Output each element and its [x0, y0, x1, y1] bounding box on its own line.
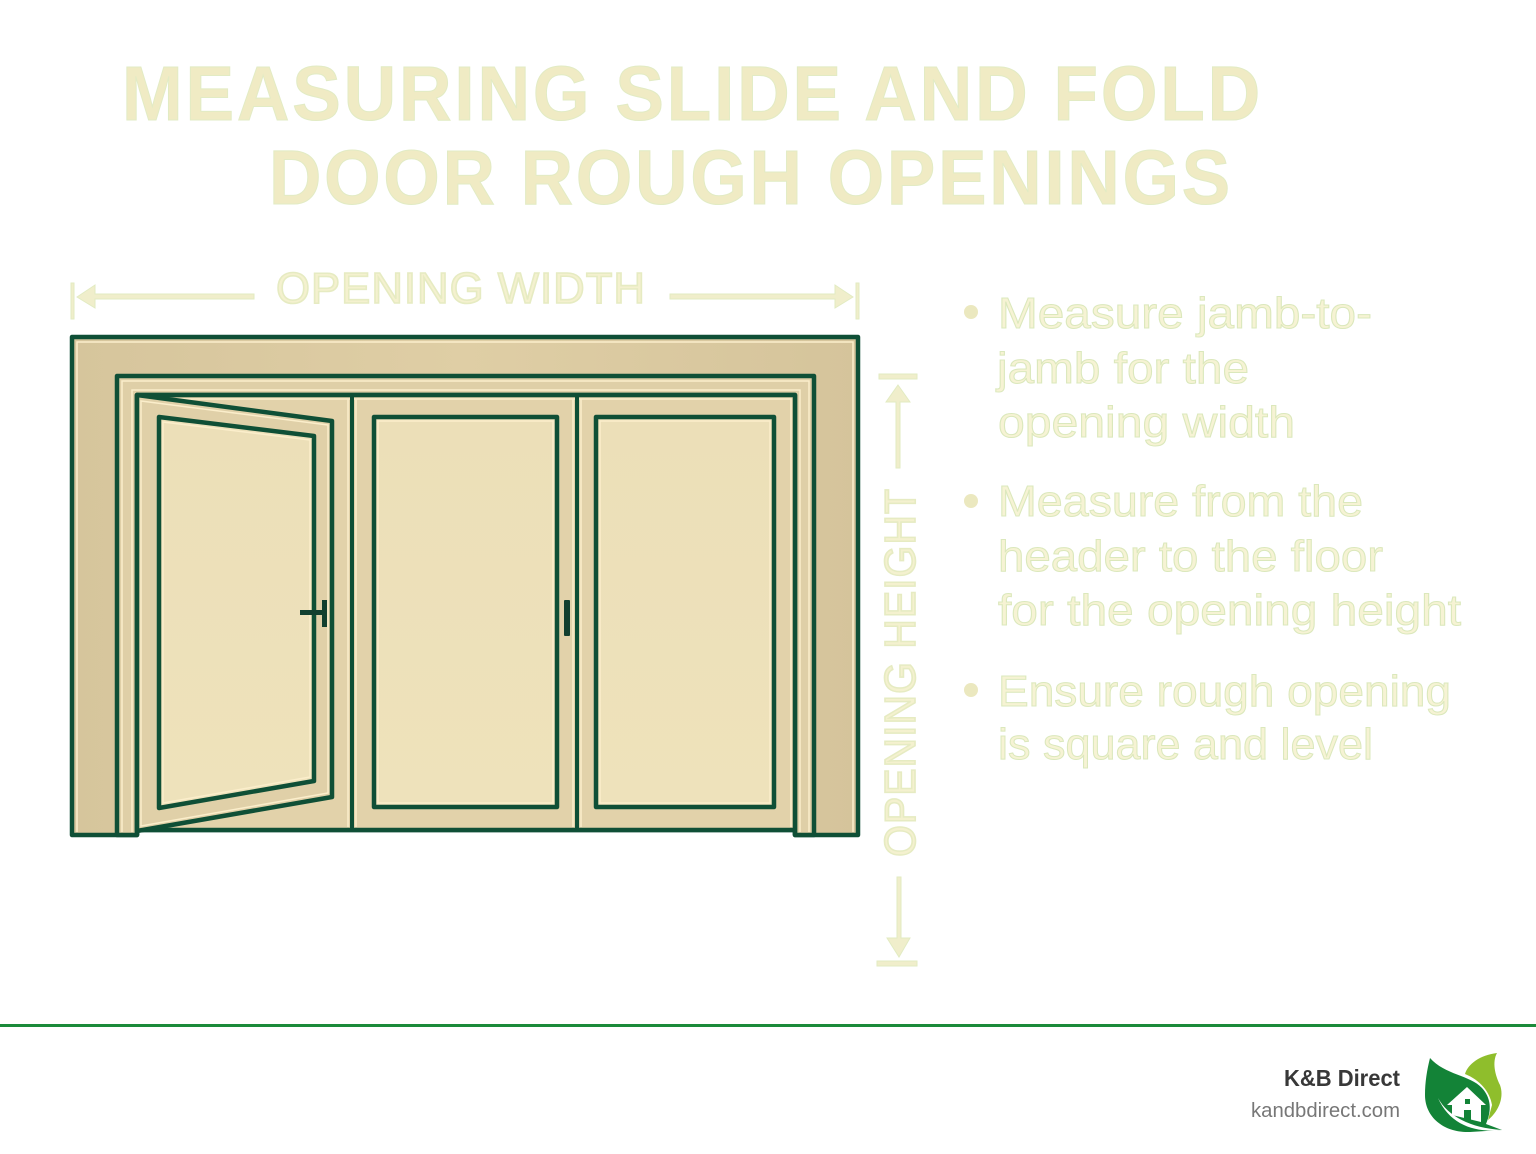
bullet 1: Measure jamb-to-	[998, 289, 1372, 338]
outer wall frame	[72, 337, 858, 835]
house	[1447, 1087, 1486, 1122]
door lever handle	[300, 600, 327, 627]
house window	[1465, 1099, 1470, 1104]
bullet 1: opening width	[998, 398, 1295, 447]
bullet 1: jamb for the	[995, 344, 1249, 393]
title: DOOR ROUGH OPENINGS	[269, 135, 1233, 221]
leaf highlight curve	[1438, 1098, 1502, 1131]
right width arrow	[670, 283, 859, 319]
bullet 3: is square and level	[998, 720, 1373, 769]
bullet 2: header to the floor	[998, 532, 1383, 581]
inner frame	[117, 376, 814, 835]
opening width dimension	[71, 264, 859, 319]
door frame edge	[137, 395, 795, 835]
dark green leaf	[1425, 1058, 1502, 1132]
door diagram	[72, 337, 858, 835]
door opening background	[137, 395, 795, 830]
brand name: K&B Direct	[1284, 1065, 1400, 1091]
opening height dimension	[876, 374, 925, 966]
fold dividers	[352, 395, 577, 830]
brand url: kandbdirect.com	[1251, 1099, 1400, 1122]
bullet 2: Measure from the	[998, 477, 1363, 526]
footer divider	[0, 1024, 1536, 1027]
opening height label: OPENING HEIGHT	[876, 488, 925, 857]
bullet 3: Ensure rough opening	[998, 667, 1451, 716]
icon: K&B Direct logo	[1425, 1053, 1502, 1132]
bullet 1	[964, 289, 1372, 447]
middle door handle	[564, 600, 570, 636]
bullet 2: for the opening height	[998, 586, 1461, 635]
middle door panel	[374, 417, 557, 807]
top height arrow	[879, 374, 917, 468]
open door panel	[159, 417, 314, 808]
left width arrow	[71, 283, 254, 319]
bullet 3	[964, 667, 1451, 769]
bullet list	[964, 289, 1461, 769]
opening width label: OPENING WIDTH	[276, 264, 646, 313]
open door leaf	[137, 395, 332, 831]
light green leaf	[1465, 1053, 1502, 1120]
bullet 2	[964, 477, 1461, 635]
house door	[1464, 1110, 1471, 1120]
bottom height arrow	[877, 877, 917, 966]
right door panel	[596, 417, 774, 807]
title: MEASURING SLIDE AND FOLD	[122, 51, 1263, 137]
title	[122, 51, 1263, 221]
